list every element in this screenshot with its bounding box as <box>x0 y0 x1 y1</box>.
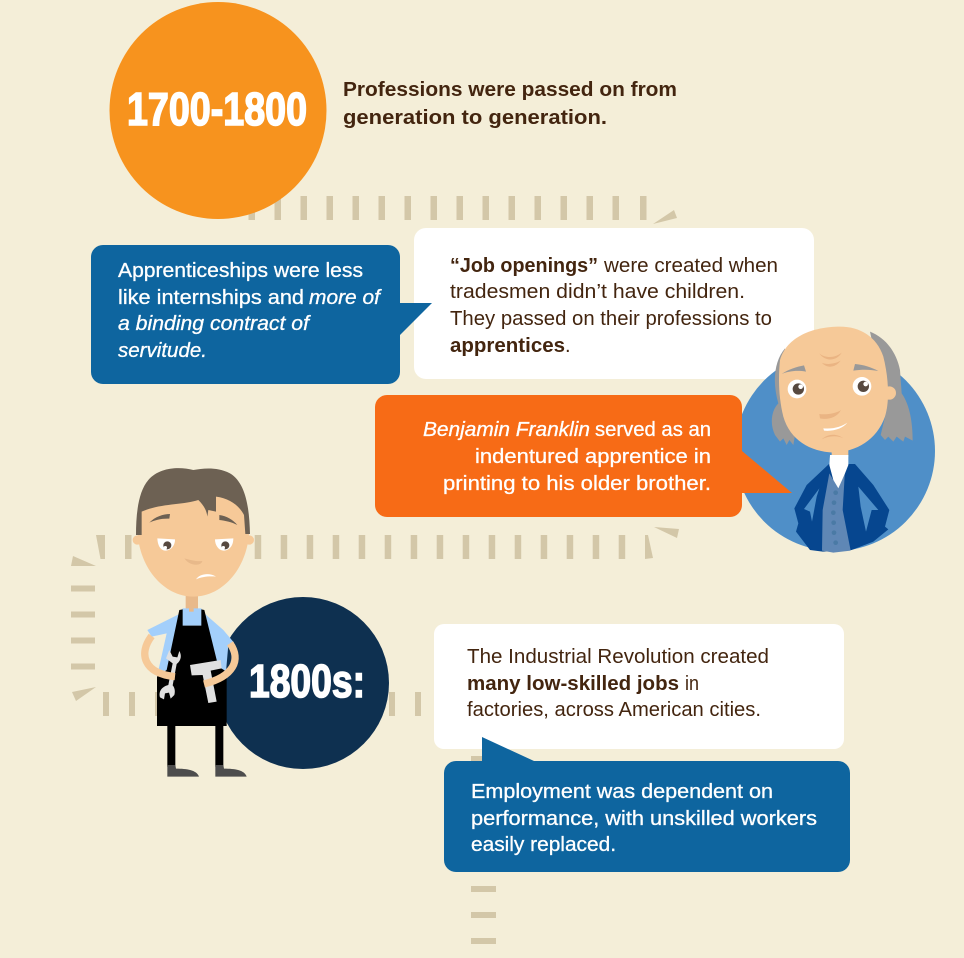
intro text: generation to generation. <box>343 107 607 129</box>
callout: job openings: tradesmen didn’t have children. <box>450 281 745 303</box>
callout: Benjamin Franklin: printing to his older brother. <box>443 473 711 495</box>
callout: job openings: were created when <box>603 255 778 277</box>
callout: Benjamin Franklin: Benjamin Franklin <box>423 419 590 441</box>
callout: job openings: . <box>565 335 571 357</box>
intro text: Professions were passed on from <box>343 79 677 101</box>
dashed timeline <box>71 196 679 944</box>
character: apprentice boy <box>133 468 254 777</box>
callout: industrial revolution: many low-skilled jobs <box>467 673 679 695</box>
callout: apprenticeships: Apprenticeships were less <box>118 260 363 282</box>
callout: apprenticeships: servitude. <box>118 340 207 362</box>
character: Benjamin Franklin <box>735 327 935 553</box>
callout: Benjamin Franklin: indentured apprentice in <box>475 446 711 468</box>
callout: industrial revolution: factories, across American cities. <box>467 699 761 721</box>
circle: 1700-1800: 1700-1800 <box>127 83 307 135</box>
callout: industrial revolution <box>434 624 844 749</box>
callout: employment <box>444 737 850 872</box>
callout: job openings <box>414 228 814 379</box>
circle: 1800s <box>217 597 389 769</box>
callout: job openings: “Job openings” <box>450 255 598 277</box>
intro text <box>343 79 677 129</box>
callout: apprenticeships: like internships and <box>118 287 304 309</box>
callout: apprenticeships: more of <box>309 287 383 309</box>
callout: Benjamin Franklin: served as an <box>595 419 711 441</box>
circle: 1800s: 1800s: <box>249 655 365 707</box>
callout: apprenticeships <box>91 245 432 384</box>
callout: employment: easily replaced. <box>471 834 616 856</box>
callout: employment: performance, with unskilled workers <box>471 808 817 830</box>
callout: industrial revolution: The Industrial Revolution created <box>467 646 769 668</box>
callout: job openings: apprentices <box>450 335 565 357</box>
callout: employment: Employment was dependent on <box>471 781 773 803</box>
callout: apprenticeships: a binding contract of <box>118 313 312 335</box>
circle: 1700-1800 <box>110 2 326 219</box>
callout: Benjamin Franklin <box>375 395 792 517</box>
callout: job openings: They passed on their professions to <box>450 308 772 330</box>
callout: industrial revolution: in <box>685 673 699 695</box>
